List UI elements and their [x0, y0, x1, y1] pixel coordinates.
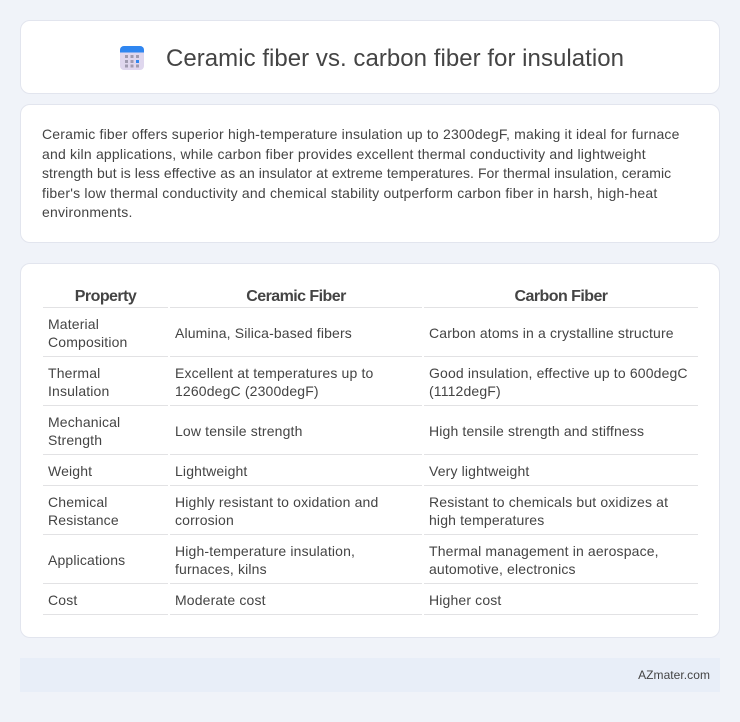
table header: Property: [75, 288, 136, 305]
table header: Carbon Fiber: [515, 288, 607, 305]
row: thermal insulation: Good insulation, effective up to 600degC: [429, 365, 688, 381]
footer credit: AZmater.com: [638, 668, 710, 682]
row: mechanical strength: Low tensile strength: [175, 423, 303, 439]
row: material composition: Material: [48, 316, 99, 332]
row: material composition: [48, 316, 674, 350]
intro paragraph: environments.: [42, 204, 133, 220]
intro text panel: [20, 104, 720, 243]
intro paragraph: strength but is less effective as an insulator at extreme temperatures. For thermal insulation, ceramic: [42, 165, 671, 181]
row: thermal insulation: Insulation: [48, 383, 109, 399]
row: applications: furnaces, kilns: [175, 561, 267, 577]
row: applications: Thermal management in aerospace,: [429, 543, 659, 559]
table header: [75, 288, 608, 305]
intro paragraph: Ceramic fiber offers superior high-temperature insulation up to 2300degF, making it ideal for furnace: [42, 126, 680, 142]
row: weight: Lightweight: [175, 463, 247, 479]
row: thermal insulation: (1112degF): [429, 383, 501, 399]
table header: Ceramic Fiber: [246, 288, 346, 305]
intro paragraph: and kiln applications, while carbon fiber provides excellent thermal conductivity and lightweight: [42, 146, 646, 162]
row: material composition: Composition: [48, 334, 127, 350]
row: thermal insulation: Thermal: [48, 365, 100, 381]
row: mechanical strength: Mechanical: [48, 414, 120, 430]
row: chemical resistance: Highly resistant to oxidation and: [175, 494, 378, 510]
row: cost: Higher cost: [429, 592, 501, 608]
row: cost: [48, 592, 502, 608]
row: cost: Cost: [48, 592, 77, 608]
row: mechanical strength: Strength: [48, 432, 102, 448]
row: applications: Applications: [48, 552, 125, 568]
row: applications: [48, 543, 659, 577]
row: weight: Very lightweight: [429, 463, 529, 479]
row: cost: Moderate cost: [175, 592, 266, 608]
row: weight: [48, 463, 530, 479]
comparison table: [43, 288, 698, 615]
icon: calendar: [120, 46, 144, 70]
row: applications: High-temperature insulation,: [175, 543, 355, 559]
row: material composition: Alumina, Silica-based fibers: [175, 325, 352, 341]
row: chemical resistance: Chemical: [48, 494, 108, 510]
row: mechanical strength: High tensile strength and stiffness: [429, 423, 644, 439]
row: chemical resistance: Resistant to chemicals but oxidizes at: [429, 494, 668, 510]
row: chemical resistance: Resistance: [48, 512, 119, 528]
row: weight: Weight: [48, 463, 92, 479]
title card: [20, 20, 720, 94]
row: chemical resistance: corrosion: [175, 512, 234, 528]
row: thermal insulation: 1260degC (2300degF): [175, 383, 319, 399]
row: mechanical strength: [48, 414, 644, 448]
row: chemical resistance: high temperatures: [429, 512, 544, 528]
row: material composition: Carbon atoms in a crystalline structure: [429, 325, 674, 341]
row: applications: automotive, electronics: [429, 561, 576, 577]
row: chemical resistance: [48, 494, 668, 528]
title: Ceramic fiber vs. carbon fiber for insulation: [166, 45, 624, 72]
intro paragraph: [42, 126, 680, 220]
row: thermal insulation: Excellent at temperatures up to: [175, 365, 373, 381]
intro paragraph: fiber's low thermal conductivity and chemical stability outperform carbon fiber in harsh, high-heat: [42, 184, 657, 200]
row: thermal insulation: [48, 365, 688, 399]
footer bar: [20, 658, 720, 692]
comparison table panel: [20, 263, 720, 638]
